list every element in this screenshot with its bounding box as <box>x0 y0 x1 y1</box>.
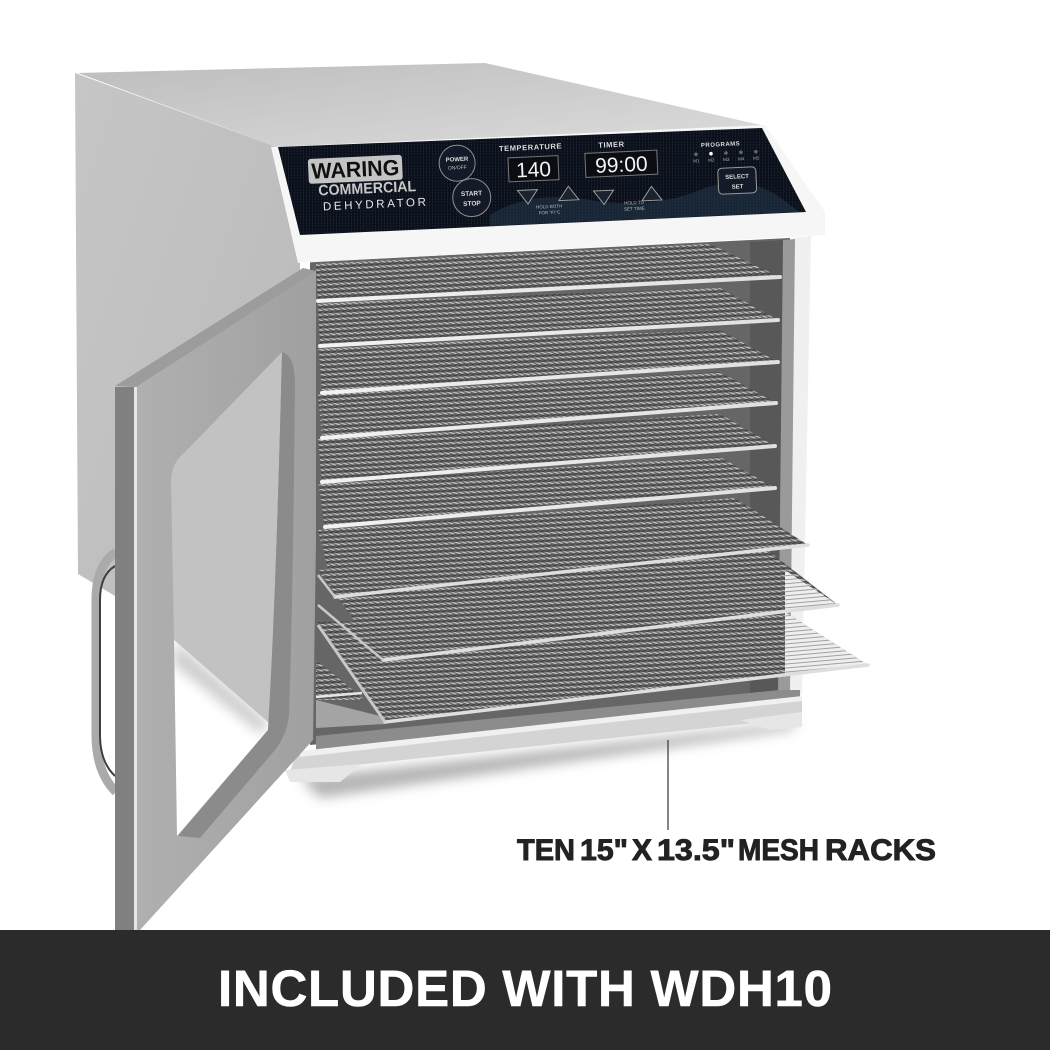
select set button: SELECT <box>725 174 749 181</box>
hint labels: HOLD BOTH <box>536 203 562 210</box>
base tray <box>285 690 802 782</box>
dehydrator body <box>75 63 811 798</box>
callout: mesh racks label: MESH <box>738 834 819 867</box>
rack 3 <box>318 330 778 393</box>
hint labels <box>536 200 645 216</box>
rack 9 <box>318 612 868 722</box>
button: power: POWER <box>446 157 469 164</box>
hint labels: HOLD TO <box>624 200 645 206</box>
rack 2 <box>318 288 778 346</box>
door window: shadow on floor <box>174 640 268 735</box>
select set button <box>718 167 757 194</box>
door top edge <box>115 268 316 387</box>
button: start stop: START <box>461 190 482 198</box>
open door <box>96 268 316 930</box>
rack 6 <box>318 457 775 527</box>
callout: mesh racks label: 15" <box>580 834 628 867</box>
timer display: TIMER <box>598 140 625 150</box>
white fascia <box>271 125 825 263</box>
top panel <box>78 63 765 147</box>
product name: DEHYDRATOR <box>323 197 426 213</box>
button: power: ON/OFF <box>448 165 467 172</box>
timer display <box>584 138 658 178</box>
button: start stop: STOP <box>463 200 482 208</box>
banner heading: INCLUDED WITH WDH10 <box>218 960 832 1017</box>
control panel <box>271 125 825 263</box>
mesh racks <box>316 244 868 728</box>
callout: leader line <box>667 740 669 830</box>
logo: Waring Commercial: COMMERCIAL <box>318 178 417 200</box>
logo: Waring Commercial: WARING <box>311 155 400 184</box>
door window: gray side <box>171 352 282 722</box>
button: power <box>438 144 476 182</box>
programs: M1 <box>693 158 700 163</box>
door handle <box>96 552 116 792</box>
programs: M4 <box>738 156 745 161</box>
door front frame <box>136 270 316 930</box>
programs: M2 <box>708 158 715 163</box>
interior <box>310 238 790 745</box>
door side edge <box>115 387 134 930</box>
right column <box>788 236 811 697</box>
dark panel <box>278 128 806 235</box>
callout: mesh racks label: X <box>632 834 652 867</box>
interior right wall <box>750 240 785 698</box>
callout: mesh racks label: 13.5" <box>657 834 735 867</box>
rack 5 <box>318 414 775 482</box>
button: start stop <box>452 178 492 217</box>
rack 8 <box>318 548 838 660</box>
callout: mesh racks label <box>517 834 936 867</box>
door window: white floor area <box>174 640 268 836</box>
logo: Waring Commercial <box>308 154 417 200</box>
floor shadow <box>300 722 800 798</box>
callout: mesh racks label: TEN <box>517 834 575 867</box>
temperature display <box>499 141 564 183</box>
rack 10 <box>316 660 385 728</box>
rack 7 <box>318 498 808 597</box>
rack 1 <box>316 244 780 301</box>
timer display: 99:00 <box>595 153 648 178</box>
select set button: SET <box>732 184 744 191</box>
temperature display: TEMPERATURE <box>499 141 562 153</box>
programs: M5 <box>753 155 760 161</box>
wave decoration <box>490 183 800 226</box>
door window inner edge <box>178 352 295 838</box>
footer banner <box>0 930 1050 1050</box>
programs: PROGRAMS <box>701 141 740 149</box>
programs <box>692 140 760 163</box>
callout: mesh racks label: RACKS <box>825 834 936 867</box>
temperature arrows <box>517 182 662 208</box>
rack 4 <box>318 372 776 438</box>
programs: M3 <box>723 157 730 162</box>
hint labels: FOR °F/°C <box>539 210 561 216</box>
temperature display: 140 <box>516 158 552 183</box>
hint labels: SET TIME <box>624 206 645 212</box>
side panel <box>75 73 300 760</box>
